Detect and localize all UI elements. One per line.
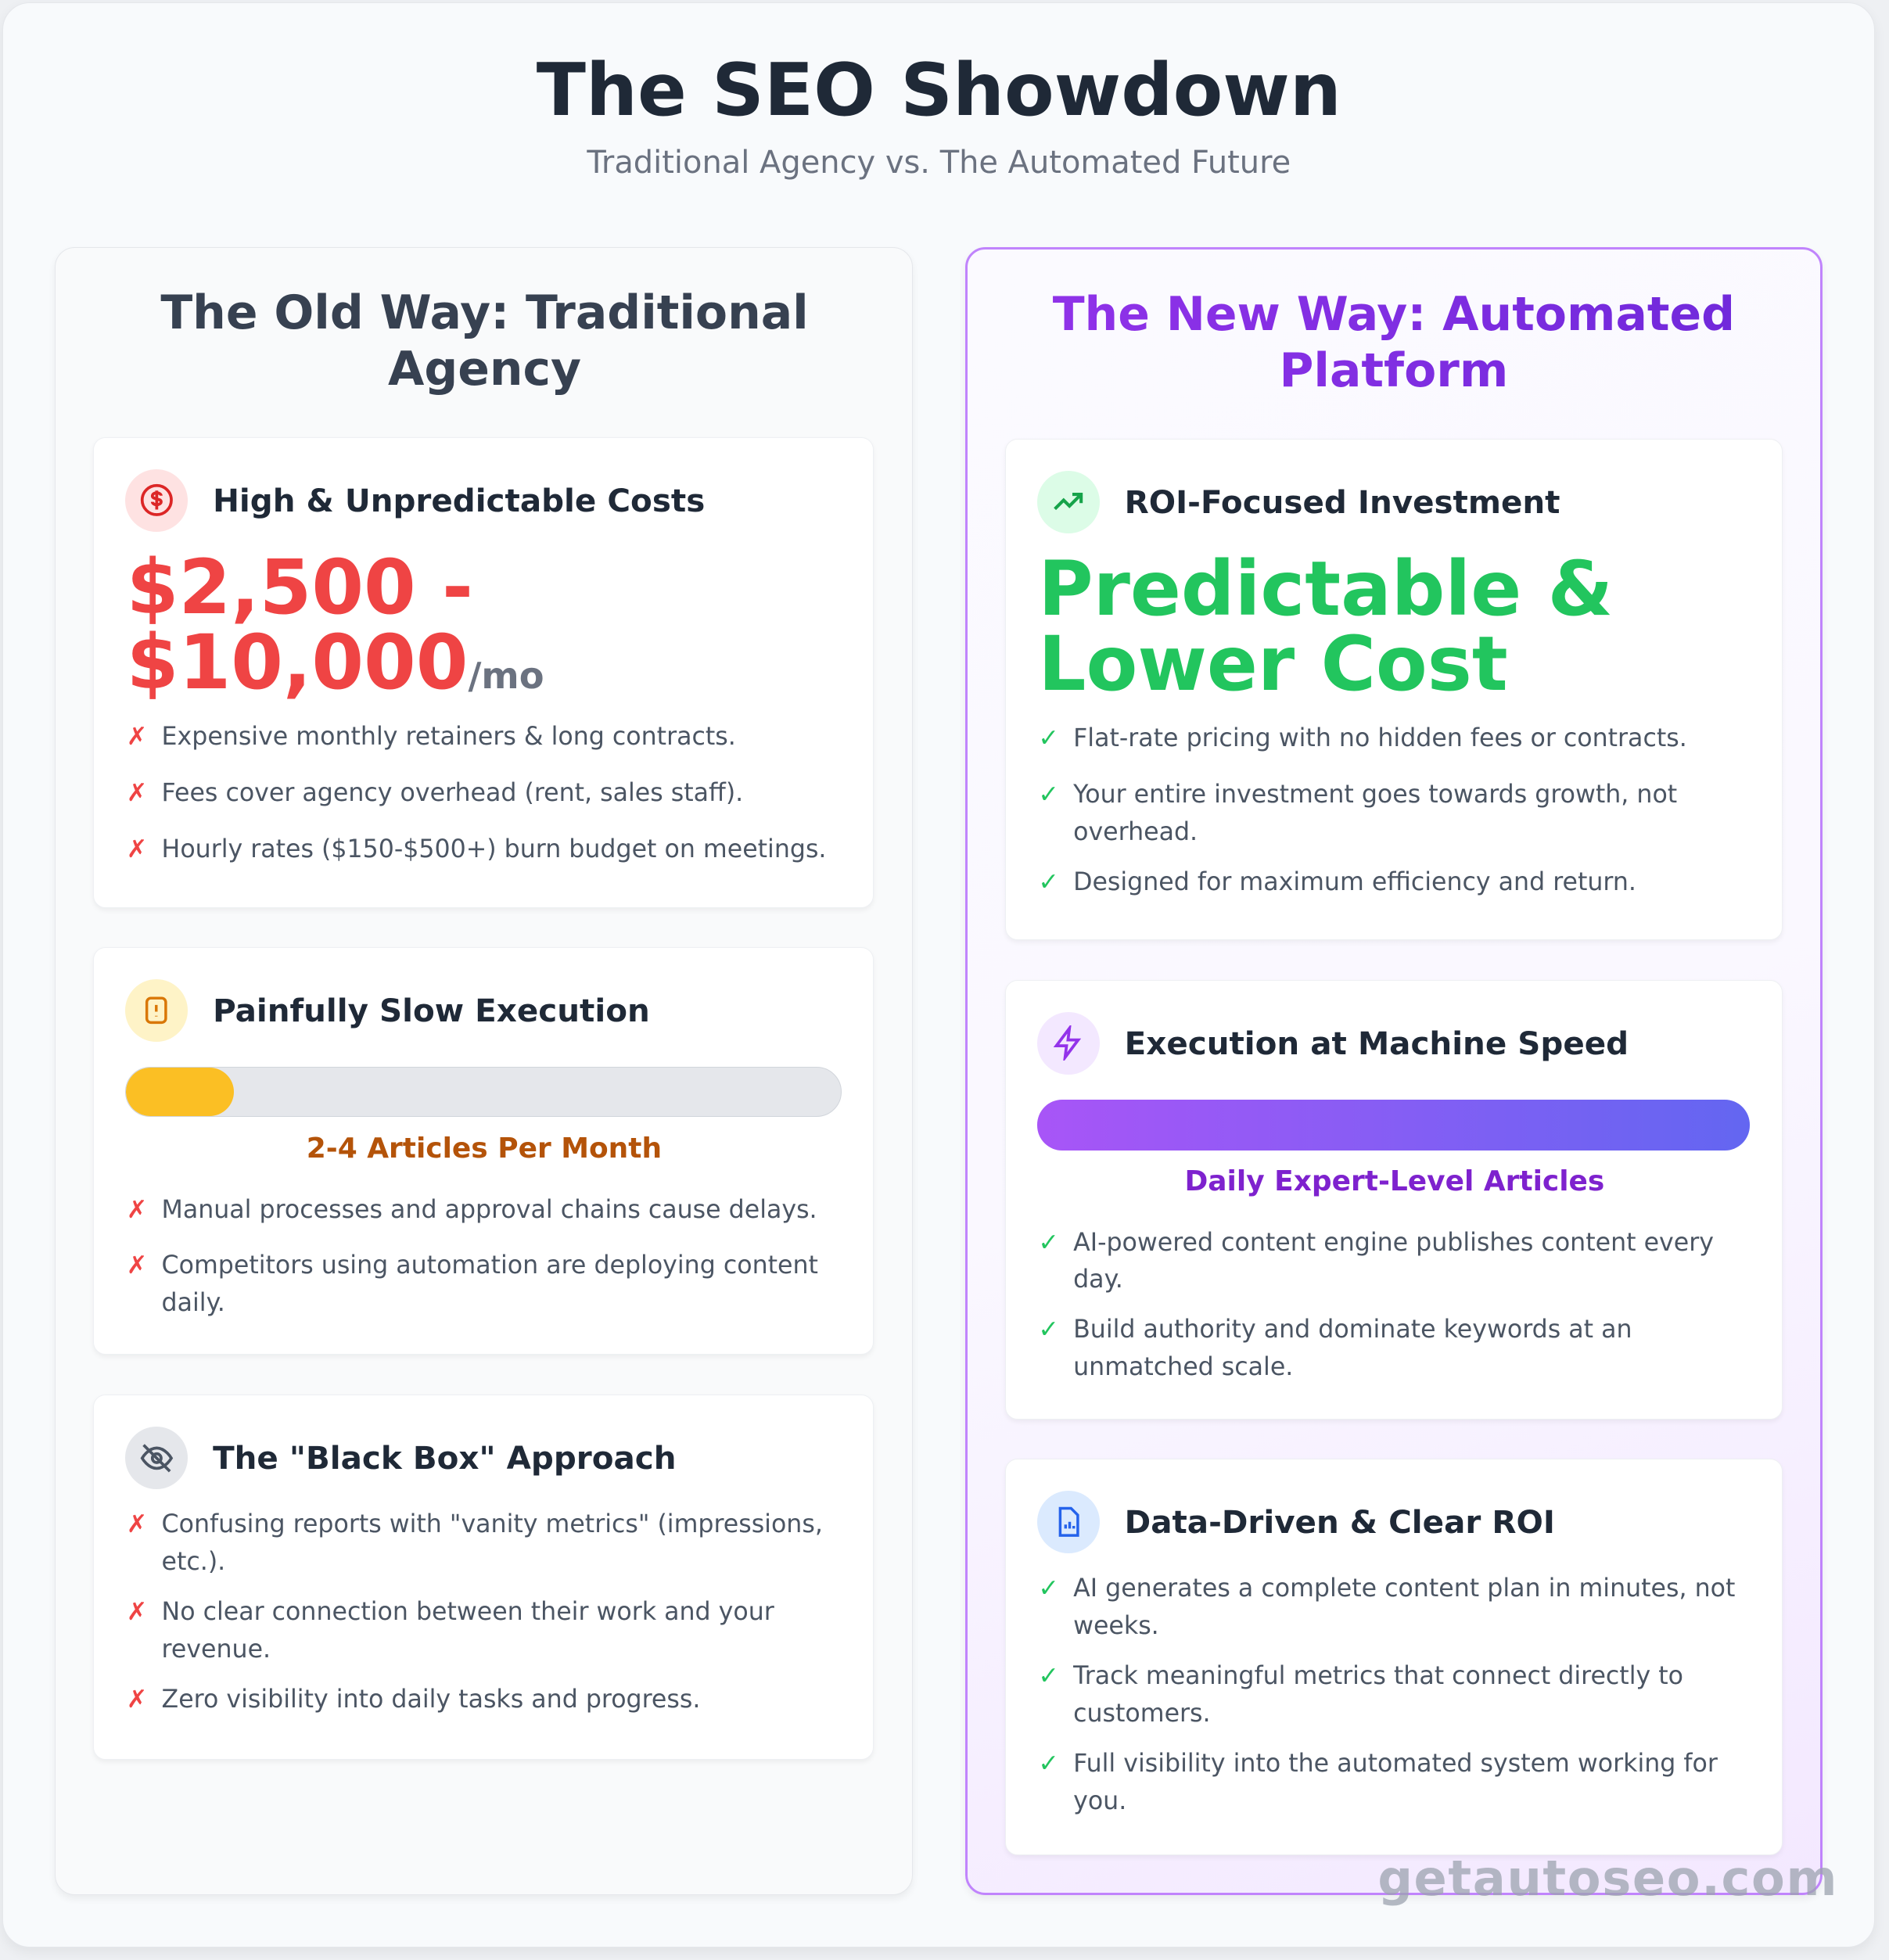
bullets: AI-powered content engine publishes content every day.: [1073, 1229, 1714, 1294]
bullets: ✓: [1038, 724, 1059, 752]
bullets: ✓: [1038, 1662, 1059, 1690]
heading: old way: [160, 285, 809, 397]
bullets: ✗: [127, 1251, 147, 1280]
watermark: getautoseo.com: [1377, 1850, 1838, 1907]
bullets: Designed for maximum efficiency and return.: [1073, 868, 1636, 896]
bullets: ✗: [127, 1598, 147, 1626]
bullets: ✓: [1038, 1574, 1059, 1603]
bullets: AI generates a complete content plan in minutes, not weeks.: [1073, 1574, 1735, 1640]
bullets: [1038, 1229, 1714, 1381]
card heading: High & Unpredictable Costs: [213, 482, 705, 519]
bullets: ✓: [1038, 1229, 1059, 1257]
bullets: No clear connection between their work and your revenue.: [162, 1598, 774, 1664]
heading: old way: The Old Way: Traditional: [160, 285, 809, 340]
bullets: Confusing reports with "vanity metrics" (impressions, etc.).: [162, 1510, 823, 1576]
bullets: Flat-rate pricing with no hidden fees or contracts.: [1073, 724, 1687, 752]
heading: new way: [968, 287, 1820, 400]
bullets: ✗: [127, 1510, 147, 1538]
card: ROI: [1005, 439, 1783, 940]
bullets: Full visibility into the automated system working for you.: [1073, 1750, 1718, 1815]
bar label: Daily Expert-Level Articles: [1184, 1165, 1604, 1197]
bullets: Track meaningful metrics that connect directly to customers.: [1073, 1662, 1683, 1728]
icon: eye off: [125, 1427, 188, 1489]
bullets: ✓: [1038, 868, 1059, 896]
bullets: ✓: [1038, 781, 1059, 809]
bullets: [127, 723, 826, 863]
price: $10,000/mo: [127, 619, 544, 706]
title: The SEO Showdown: [537, 48, 1341, 132]
bullets: Your entire investment goes towards growth, not overhead.: [1073, 781, 1677, 846]
progress bar: [125, 1067, 842, 1117]
icon: report: [1037, 1491, 1100, 1553]
card heading: Execution at Machine Speed: [1125, 1025, 1629, 1062]
bullets: Zero visibility into daily tasks and progress.: [162, 1685, 700, 1714]
card: data: [1005, 1459, 1783, 1855]
bullets: ✗: [127, 779, 147, 807]
big text: Predictable &: [1038, 545, 1613, 633]
bullets: ✓: [1038, 1750, 1059, 1778]
card: black box: [93, 1395, 874, 1760]
bullets: [127, 1510, 823, 1714]
panel: old way: [55, 247, 913, 1895]
bullets: Manual processes and approval chains cause delays.: [162, 1196, 817, 1224]
bullets: ✗: [127, 1685, 147, 1714]
bullets: ✗: [127, 1196, 147, 1224]
bullets: [127, 1196, 818, 1317]
icon: bolt: [1037, 1012, 1100, 1075]
card: speed: [1005, 980, 1783, 1420]
bullets: [1038, 724, 1687, 896]
card: slow: [93, 947, 874, 1355]
bullets: ✗: [127, 723, 147, 751]
icon: trend: [1037, 471, 1100, 533]
big text: Lower Cost: [1038, 620, 1508, 708]
price: [127, 544, 544, 706]
bullets: Fees cover agency overhead (rent, sales staff).: [162, 779, 743, 807]
price: $2,500 -: [127, 544, 473, 631]
bullets: Expensive monthly retainers & long contracts.: [162, 723, 736, 751]
bullets: Competitors using automation are deploying content daily.: [162, 1251, 818, 1317]
bullets: ✓: [1038, 1316, 1059, 1344]
heading: new way: Platform: [1280, 343, 1508, 398]
progress bar: [1037, 1100, 1750, 1151]
bullets: ✗: [127, 835, 147, 863]
heading: old way: Agency: [388, 342, 581, 397]
card: costs: [93, 437, 874, 908]
big text: [1038, 545, 1613, 708]
card heading: The "Black Box" Approach: [213, 1439, 676, 1477]
heading: new way: The New Way: Automated: [1053, 287, 1735, 342]
subtitle: Traditional Agency vs. The Automated Future: [587, 145, 1291, 181]
card heading: ROI-Focused Investment: [1125, 483, 1560, 521]
card heading: Data-Driven & Clear ROI: [1125, 1503, 1555, 1541]
bullets: [1038, 1574, 1735, 1815]
icon: dollar: [125, 469, 188, 532]
icon: clock: [125, 979, 188, 1042]
panel: new way: [965, 247, 1823, 1895]
bullets: Hourly rates ($150-$500+) burn budget on meetings.: [162, 835, 826, 863]
bullets: Build authority and dominate keywords at an unmatched scale.: [1073, 1316, 1632, 1381]
card heading: Painfully Slow Execution: [213, 992, 650, 1029]
bar label: 2-4 Articles Per Month: [307, 1133, 662, 1165]
